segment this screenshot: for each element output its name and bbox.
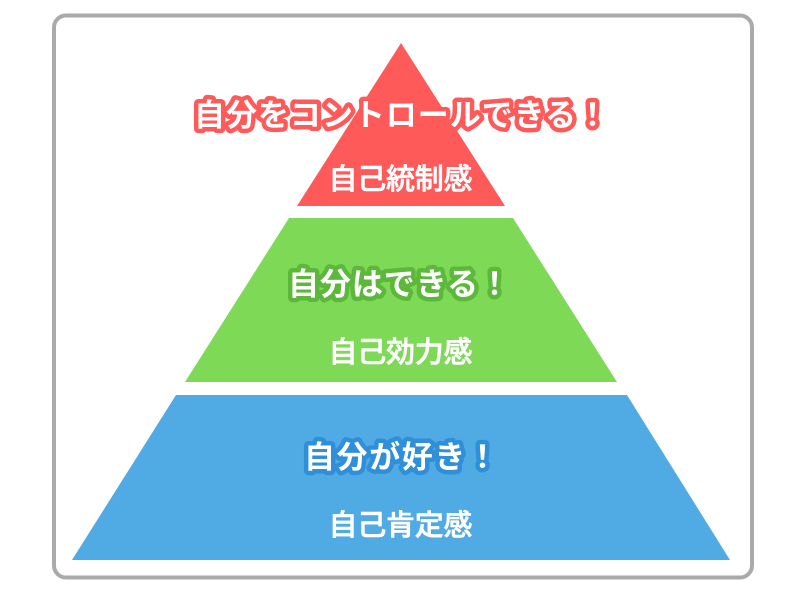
panel: top tier, self-control xyxy=(194,43,608,206)
panel: bottom tier, self-affirmation xyxy=(72,395,730,560)
heading: bottom tier: 自分が好き！ xyxy=(304,440,498,475)
label: top tier: 自己統制感 xyxy=(328,163,472,196)
blue trapezoid xyxy=(72,395,730,560)
panel: middle tier, self-efficacy xyxy=(185,218,617,382)
heading: middle tier: 自分はできる！ xyxy=(288,267,510,302)
green trapezoid xyxy=(185,218,617,382)
label: bottom tier: 自己肯定感 xyxy=(328,509,472,542)
red triangle xyxy=(297,43,505,206)
label: middle tier: 自己効力感 xyxy=(328,336,472,369)
heading: top tier: 自分をコントロールできる！ xyxy=(194,98,608,133)
